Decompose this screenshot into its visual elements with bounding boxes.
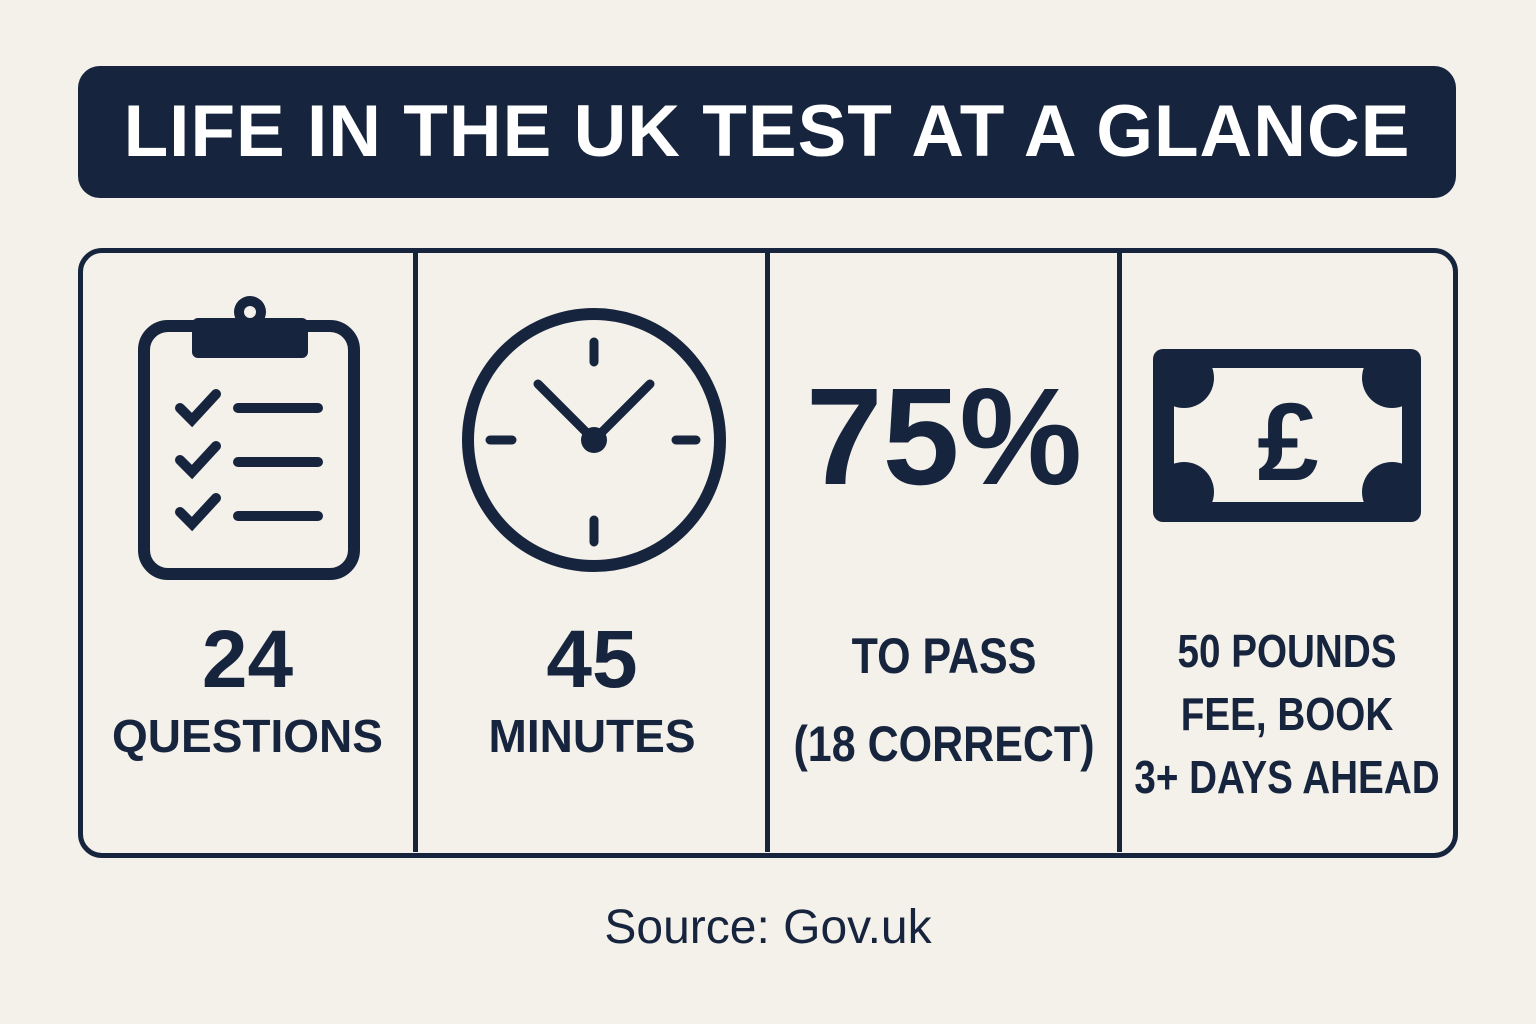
text: fee: 50 POUNDS	[1177, 625, 1397, 677]
text: 45 minutes	[488, 614, 696, 762]
text: to pass: TO PASS	[852, 628, 1036, 684]
text: 45 minutes: 45	[546, 614, 638, 705]
text: fee	[1134, 625, 1440, 803]
text: 24 questions	[112, 614, 383, 762]
icon: clock	[462, 308, 726, 572]
text: to pass: (18 CORRECT)	[793, 716, 1095, 772]
panel: facts	[78, 248, 1458, 858]
text: 24 questions: QUESTIONS	[112, 710, 383, 762]
source: Source: Gov.uk	[604, 901, 932, 954]
text: 45 minutes: MINUTES	[488, 710, 696, 762]
text: 24 questions: 24	[202, 614, 293, 705]
text: to pass	[793, 628, 1095, 772]
icon: banknote	[1153, 349, 1421, 522]
text: fee: 3+ DAYS AHEAD	[1134, 751, 1440, 803]
text: 75%: 75%	[806, 360, 1082, 514]
text: fee: FEE, BOOK	[1181, 688, 1393, 740]
icon: clipboard	[138, 296, 360, 580]
title	[78, 66, 1456, 198]
title: LIFE IN THE UK TEST AT A GLANCE	[124, 91, 1410, 172]
icon: banknote: £	[1257, 381, 1319, 504]
